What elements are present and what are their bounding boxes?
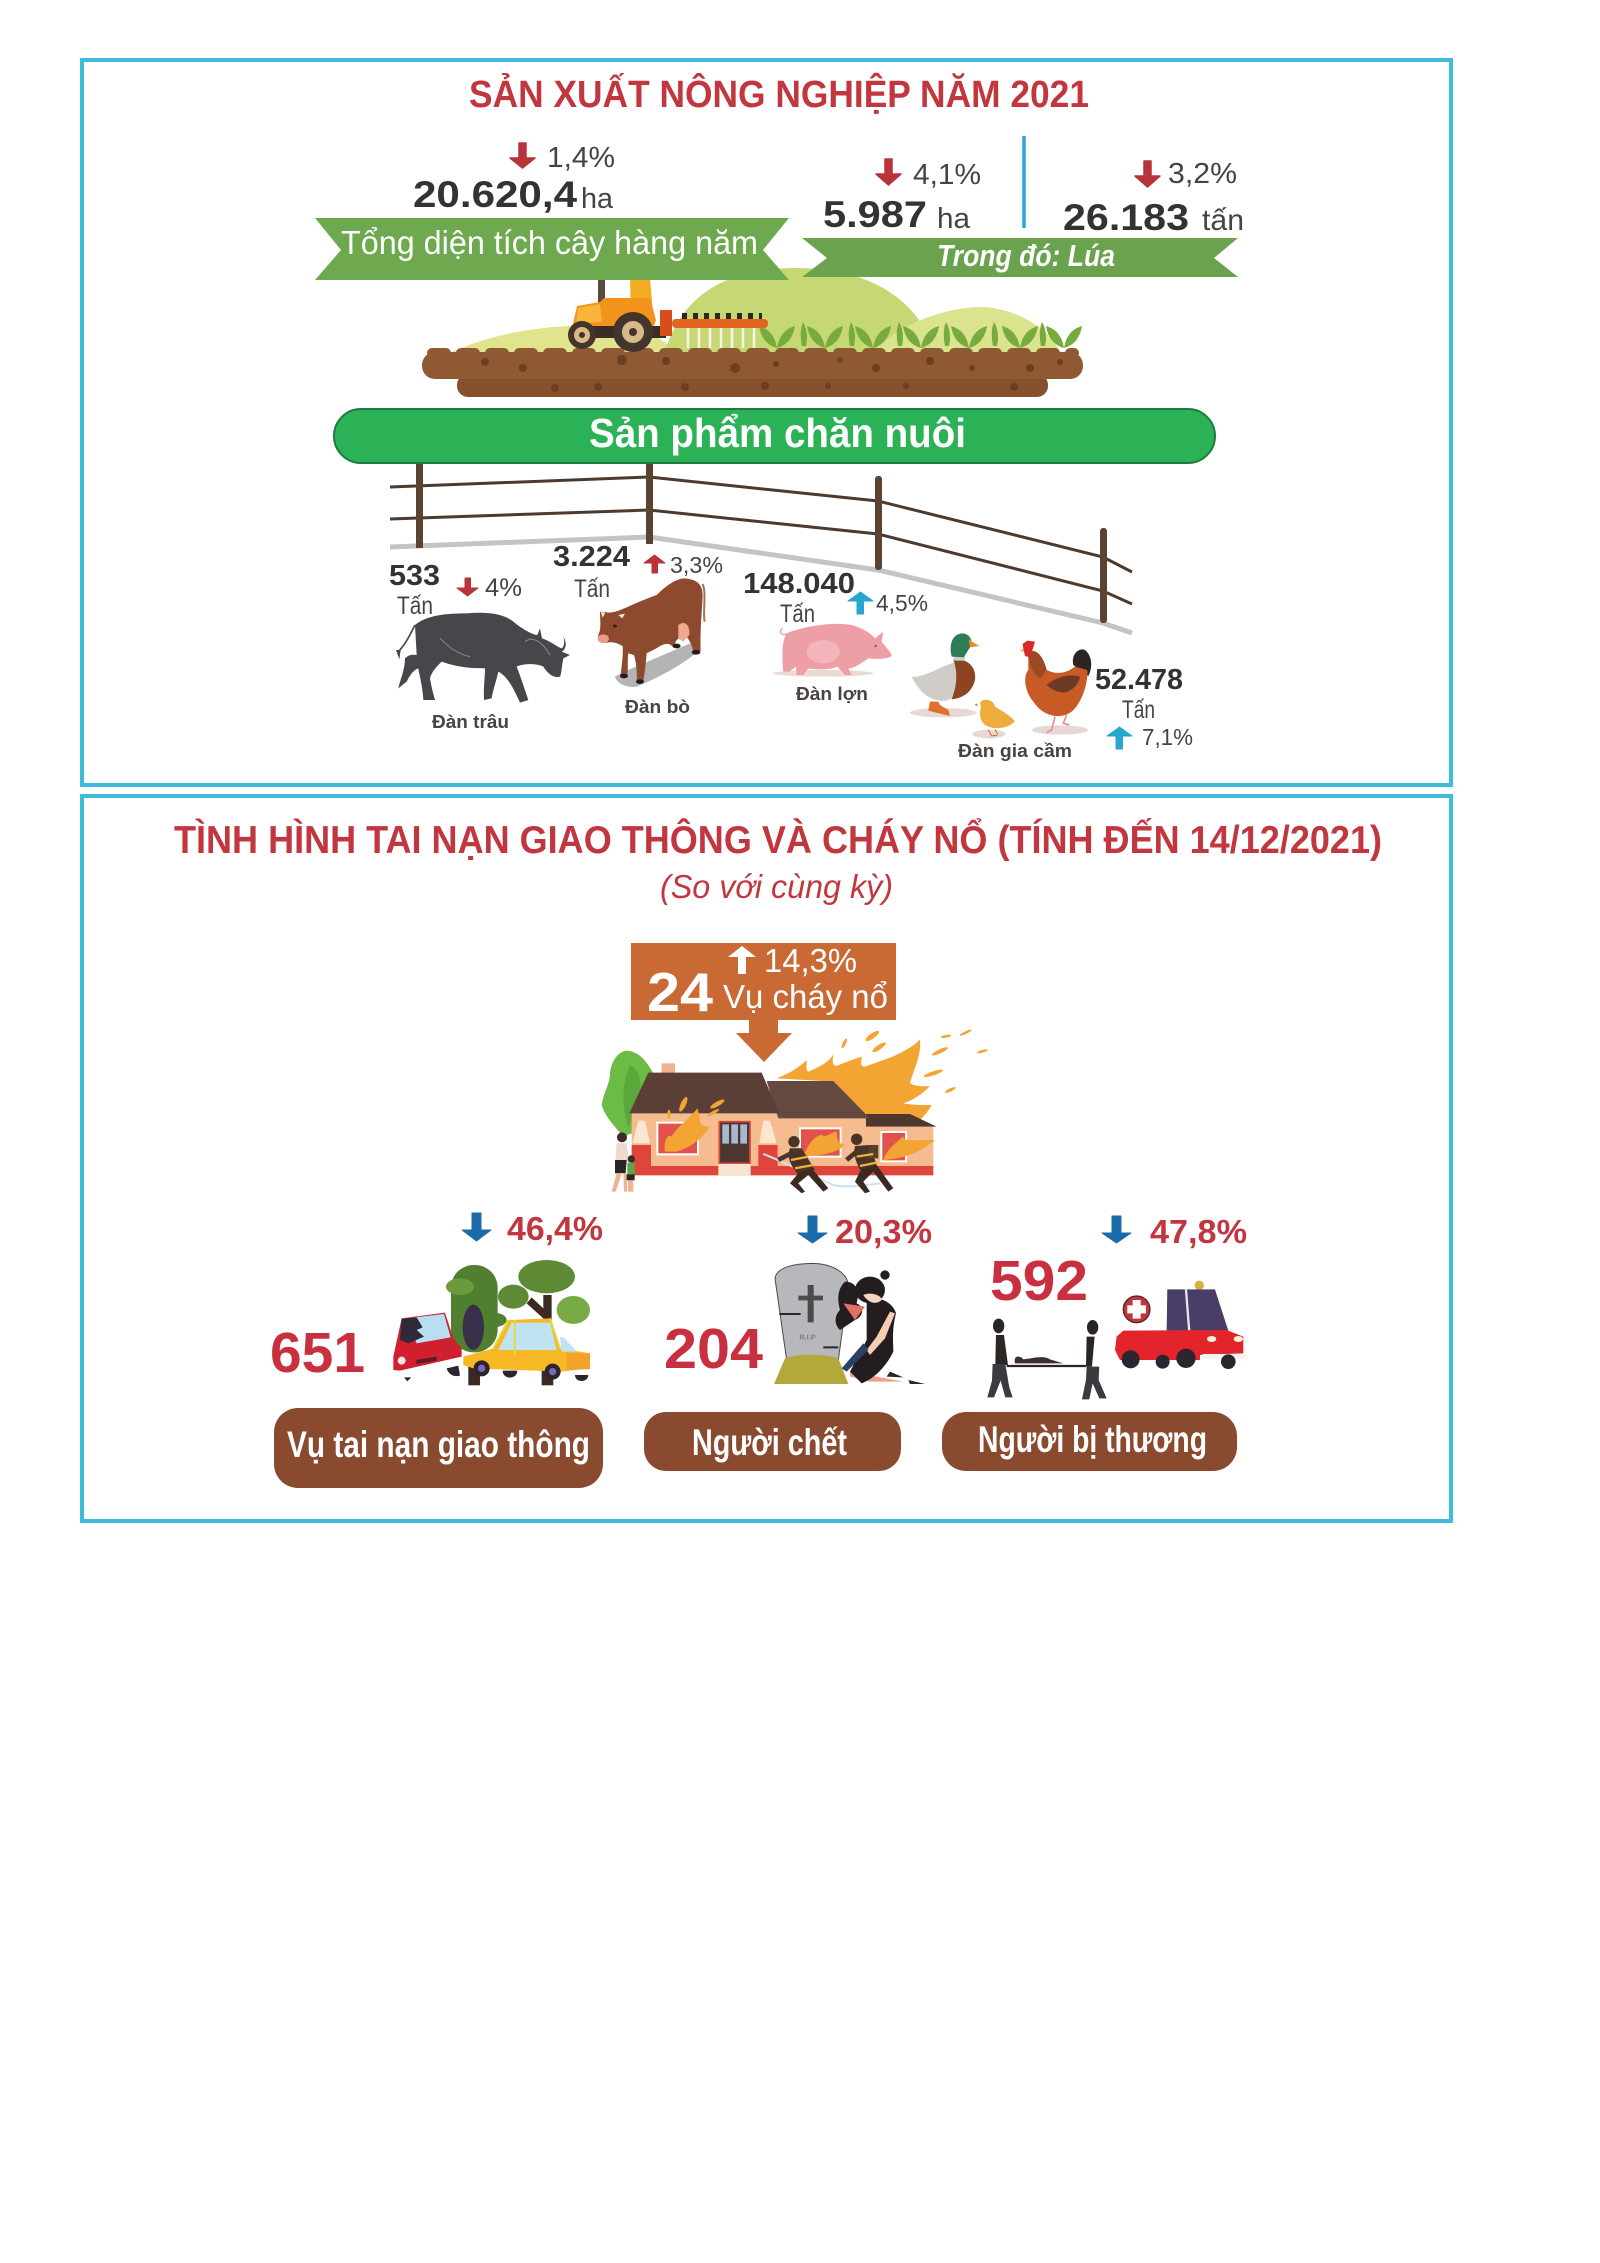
- house walls: [632, 1113, 867, 1175]
- panel: traffic accidents and fires: [82, 796, 1451, 1521]
- label and stat: pig herd: Đàn lợn: [796, 684, 868, 704]
- illustration: mourner at gravestone: [774, 1263, 925, 1384]
- heading: traffic accidents and fires: TÌNH HÌNH TAI NẠN GIAO THÔNG VÀ CHÁY NỔ (TÍNH ĐẾN 14/12/2021): [174, 817, 1382, 862]
- callout: 24 fires and explosions: Vụ cháy nổ: [723, 978, 888, 1015]
- callout: 24 fires and explosions: 24: [647, 961, 713, 1023]
- illustration: pig: [773, 624, 892, 677]
- illustration: duck, chick and hen: [910, 633, 1091, 738]
- label and stat: buffalo herd: Đàn trâu: [432, 712, 509, 732]
- illustration: cow: [598, 578, 705, 687]
- label and stat: pig herd: 4,5%: [876, 590, 928, 616]
- firefighter at back: [847, 1134, 893, 1193]
- ribbon: total annual crop area: Tổng diện tích cây hàng năm: [341, 224, 758, 261]
- tractor: [568, 278, 768, 352]
- stat: 592 injured: 47,8%: [1150, 1213, 1247, 1250]
- stat: rice area 5.987 ha: [823, 159, 981, 235]
- stat: rice area 5.987 ha: 5.987: [823, 194, 927, 235]
- label and stat: cattle herd: Đàn bò: [625, 697, 690, 717]
- label: traffic accidents: Vụ tai nạn giao thông: [287, 1424, 590, 1465]
- label and stat: buffalo herd: 4%: [485, 574, 522, 602]
- callout: 24 fires and explosions: [631, 942, 896, 1062]
- label: deaths: [644, 1412, 901, 1471]
- label and stat: cattle herd: [553, 541, 723, 717]
- label and stat: buffalo herd: [389, 560, 522, 732]
- window flames: [665, 1096, 935, 1160]
- stat: 651 traffic accidents: 46,4%: [507, 1210, 603, 1247]
- flames: [777, 1029, 988, 1120]
- stat: 204 deaths: 20,3%: [835, 1213, 932, 1250]
- stat: annual crop area 20.620,4 ha: 1,4%: [547, 142, 615, 174]
- hose: [763, 1154, 880, 1186]
- stat: rice output 26.183 tan: 3,2%: [1168, 158, 1237, 190]
- stat: 651 traffic accidents: [270, 1210, 603, 1385]
- label and stat: buffalo herd: 533: [389, 560, 440, 592]
- panel: agricultural production: [82, 60, 1451, 785]
- seedlings: [759, 322, 1082, 348]
- stat: rice output 26.183 tan: [1063, 158, 1244, 238]
- stat: annual crop area 20.620,4 ha: 20.620,4: [413, 174, 577, 215]
- stat: annual crop area 20.620,4 ha: [413, 142, 615, 215]
- banner: livestock products: [334, 409, 1215, 463]
- label: traffic accidents: [274, 1408, 603, 1488]
- label and stat: poultry: Tấn: [1122, 696, 1155, 724]
- stat: rice area 5.987 ha: ha: [937, 203, 971, 235]
- stat: 204 deaths: [664, 1213, 932, 1381]
- stat: 592 injured: [990, 1213, 1247, 1313]
- label and stat: pig herd: [743, 568, 928, 704]
- illustration: stretcher and ambulance: [987, 1281, 1245, 1399]
- ribbon: total annual crop area: [315, 218, 789, 280]
- label and stat: cattle herd: Tấn: [574, 575, 610, 603]
- label and stat: poultry: 7,1%: [1142, 724, 1193, 750]
- roofs: [662, 1063, 675, 1082]
- label: injured: Người bị thương: [978, 1419, 1207, 1460]
- windows and door: [657, 1123, 906, 1161]
- label and stat: poultry: Đàn gia cầm: [958, 741, 1072, 761]
- callout: 24 fires and explosions: 14,3%: [764, 942, 857, 979]
- woman and child: [612, 1132, 635, 1192]
- illustration: buffalo: [396, 613, 570, 703]
- ribbon: of which rice: [802, 238, 1238, 277]
- stat: 651 traffic accidents: 651: [270, 1321, 365, 1385]
- stat: rice output 26.183 tan: tấn: [1202, 204, 1244, 237]
- ribbon: of which rice: Trong đó: Lúa: [937, 238, 1115, 273]
- illustration: burning house and firefighters: [602, 1029, 988, 1193]
- stat: rice area 5.987 ha: 4,1%: [913, 159, 981, 191]
- label: deaths: Người chết: [692, 1422, 847, 1463]
- banner: livestock products: Sản phẩm chăn nuôi: [589, 410, 966, 456]
- firefighter with hose: [778, 1136, 828, 1193]
- illustration: crashed cars and trees: [393, 1260, 590, 1385]
- stat: rice output 26.183 tan: 26.183: [1063, 197, 1189, 238]
- fence: [390, 460, 1132, 633]
- subheading: compared with same period: (So với cùng kỳ): [660, 868, 893, 905]
- heading: agricultural production: SẢN XUẤT NÔNG NGHIỆP NĂM 2021: [469, 71, 1089, 116]
- hills: [452, 268, 1060, 352]
- stat: 204 deaths: 204: [664, 1317, 763, 1381]
- label and stat: pig herd: Tấn: [780, 600, 815, 628]
- stat: 592 injured: 592: [990, 1249, 1088, 1313]
- tree: [602, 1051, 653, 1137]
- label and stat: buffalo herd: Tấn: [397, 592, 433, 620]
- label and stat: poultry: [958, 664, 1193, 761]
- label and stat: pig herd: 148.040: [743, 568, 855, 600]
- label and stat: poultry: 52.478: [1095, 664, 1183, 696]
- illustration: farm field with tractor: [422, 268, 1083, 397]
- illustration: mourner at gravestone: R.I.P: [799, 1332, 816, 1341]
- label and stat: cattle herd: 3.224: [553, 541, 630, 573]
- label and stat: cattle herd: 3,3%: [670, 552, 723, 578]
- label: injured: [942, 1412, 1237, 1471]
- stat: annual crop area 20.620,4 ha: ha: [581, 183, 614, 215]
- soil: [422, 352, 1083, 397]
